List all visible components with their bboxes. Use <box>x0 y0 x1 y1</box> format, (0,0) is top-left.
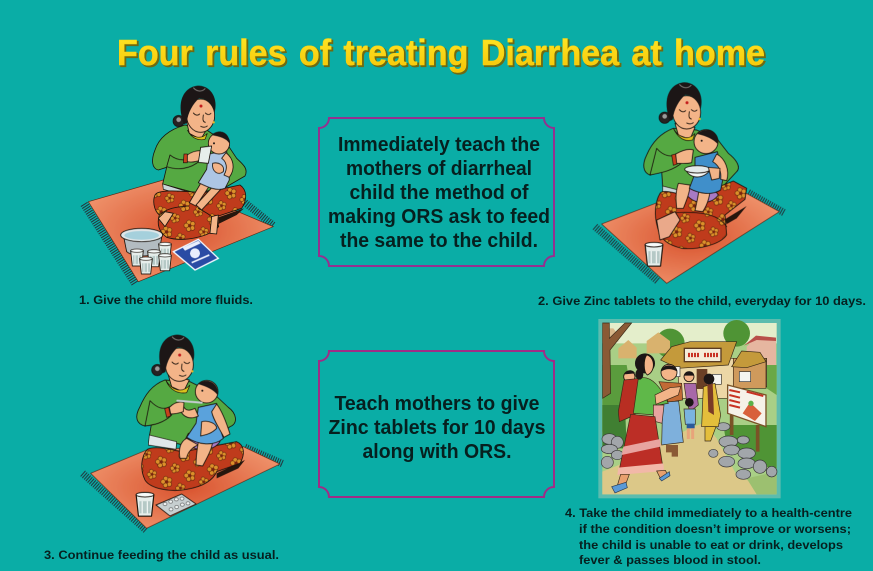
caption 4: fever & passes blood in stool. <box>579 555 761 567</box>
stones <box>601 423 777 479</box>
caption 3: 3. Continue feeding the child as usual. <box>44 550 279 562</box>
zinc tablet strip <box>156 494 196 516</box>
ORS packet <box>173 239 218 270</box>
caption 1: 1. Give the child more fluids. <box>79 295 253 307</box>
woman in yellow walking away <box>702 374 721 441</box>
glass of water <box>136 492 154 516</box>
steel pot <box>121 228 163 256</box>
left tree <box>603 323 632 398</box>
panel: zinc teaching message <box>319 351 554 497</box>
title: Four rules of treating Diarrhea at home <box>117 32 765 73</box>
panel: ORS teaching message: child the method of <box>350 181 529 204</box>
man in blue <box>659 364 683 457</box>
panel: ORS teaching message: Immediately teach the <box>338 133 540 156</box>
illustration: going to the health centre <box>598 319 781 498</box>
health centre building <box>661 342 767 398</box>
illustration: mother giving zinc to child from a bowl <box>595 82 784 283</box>
panel: ORS teaching message: mothers of diarrheal <box>346 157 532 180</box>
panel: zinc teaching message: Teach mothers to give <box>334 392 540 415</box>
illustration: mother giving fluids to child <box>84 86 274 283</box>
title: Four rules of treating Diarrhea at home <box>118 34 766 74</box>
notice board <box>728 385 766 452</box>
caption 4: 4. Take the child immediately to a health-centre <box>565 508 852 520</box>
panel: zinc teaching message: Zinc tablets for 10 days <box>328 416 546 439</box>
caption 4 <box>565 508 852 567</box>
panel: ORS teaching message: making ORS ask to feed <box>328 205 550 228</box>
panel: zinc teaching message: along with ORS. <box>362 440 512 463</box>
panel: ORS teaching message <box>319 118 554 266</box>
woman in purple with child <box>684 371 698 412</box>
caption 4: if the condition doesn’t improve or worsens; <box>579 524 851 536</box>
small boy <box>684 398 695 439</box>
caption 4: the child is unable to eat or drink, develops <box>579 540 843 552</box>
glass of water <box>645 242 663 266</box>
glasses of fluid <box>131 242 171 274</box>
mother in green blouse and red skirt <box>612 353 681 493</box>
illustration: mother spoon-feeding child <box>83 335 283 530</box>
panel: ORS teaching message: the same to the child. <box>340 229 538 252</box>
caption 2: 2. Give Zinc tablets to the child, everyday for 10 days. <box>538 296 866 308</box>
bowl <box>685 166 710 177</box>
